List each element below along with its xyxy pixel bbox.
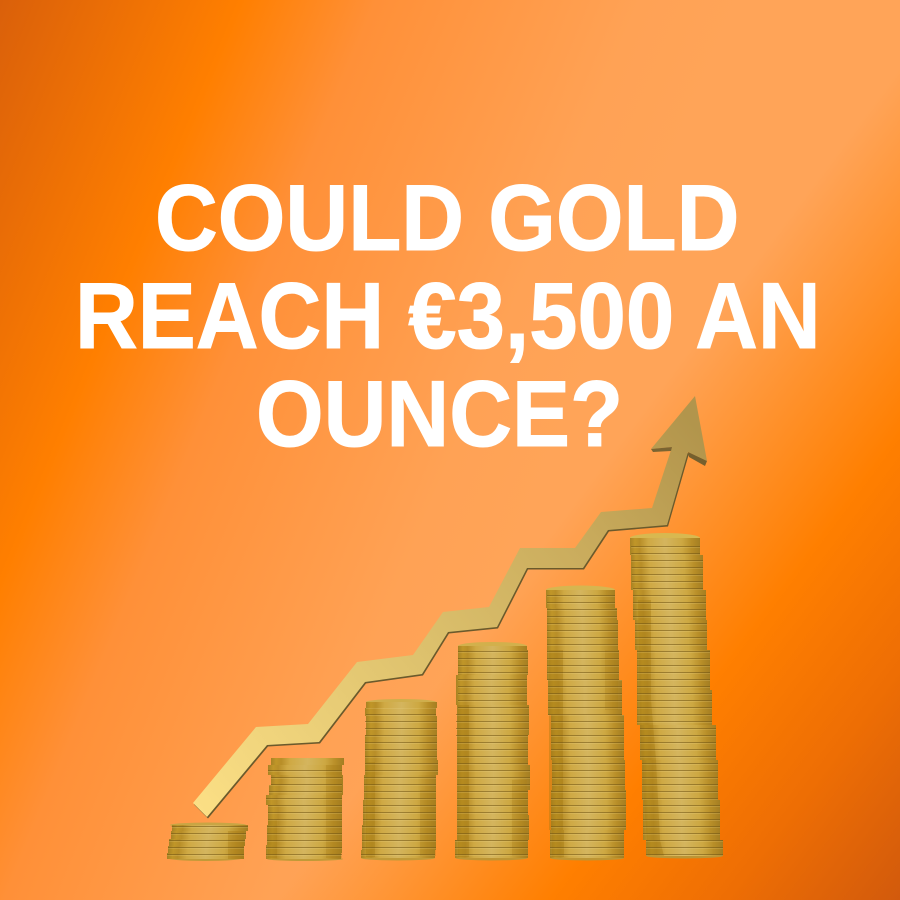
coin stack 1 [167, 822, 248, 861]
rising arrow [193, 396, 707, 818]
coin stack 3 [361, 699, 438, 860]
title [75, 166, 821, 467]
coin stack 6 [630, 533, 723, 858]
coin stack 2 [266, 758, 344, 861]
coin stack 4 [455, 642, 530, 860]
coin stack 5 [546, 586, 626, 860]
title: OUNCE? [256, 362, 623, 467]
title: REACH €3,500 AN [75, 264, 821, 369]
title: COULD GOLD [155, 166, 739, 271]
